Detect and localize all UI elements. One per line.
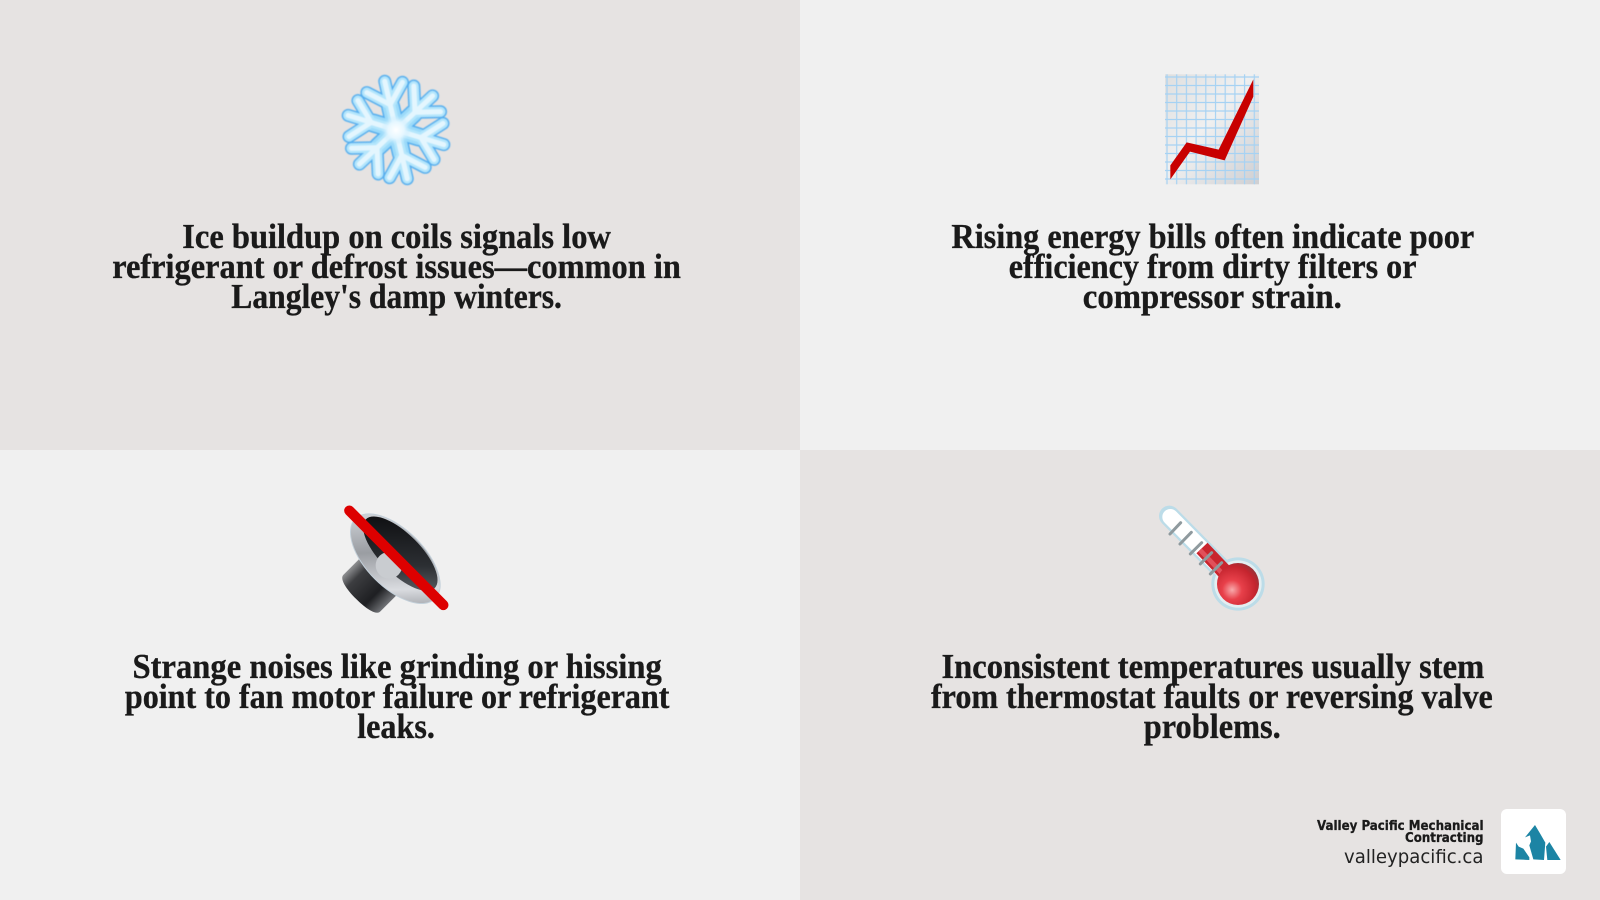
text: inconsistent temperatures: from thermostat faults or reversing valve bbox=[931, 677, 1493, 716]
text: ice buildup: refrigerant or defrost issues—common in bbox=[112, 247, 681, 286]
text: inconsistent temperatures: Inconsistent temperatures usually stem bbox=[942, 647, 1484, 686]
text: ice buildup bbox=[112, 217, 681, 316]
text: ice buildup: Ice buildup on coils signals low bbox=[182, 217, 612, 256]
icon: thermometer bbox=[1169, 516, 1265, 611]
text: strange noises: point to fan motor failure or refrigerant bbox=[125, 677, 670, 716]
panel: strange noises bbox=[0, 450, 800, 900]
text: rising energy bills bbox=[951, 217, 1474, 316]
icon: snowflake bbox=[333, 69, 459, 191]
footer: company name and website: Valley Pacific Mechanical bbox=[1317, 819, 1484, 834]
text: strange noises: Strange noises like grinding or hissing bbox=[132, 647, 662, 686]
icon: chart with rising line bbox=[1165, 74, 1259, 184]
text: inconsistent temperatures: problems. bbox=[1144, 707, 1281, 746]
text: rising energy bills: compressor strain. bbox=[1083, 277, 1342, 316]
footer: company name and website: Contracting bbox=[1405, 831, 1484, 846]
logo card: mountain bbox=[1501, 809, 1566, 874]
text: inconsistent temperatures bbox=[931, 647, 1493, 746]
panel: inconsistent temperatures bbox=[800, 450, 1600, 900]
text: rising energy bills: efficiency from dirty filters or bbox=[1009, 247, 1416, 286]
text: rising energy bills: Rising energy bills often indicate poor bbox=[951, 217, 1474, 256]
text: ice buildup: Langley's damp winters. bbox=[231, 277, 562, 316]
footer: company name and website bbox=[1317, 819, 1484, 868]
text: strange noises: leaks. bbox=[357, 707, 435, 746]
panel: rising energy bills bbox=[800, 0, 1600, 450]
panel: ice buildup bbox=[0, 0, 800, 450]
footer: company name and website: valleypacific.ca bbox=[1344, 846, 1484, 868]
text: strange noises bbox=[125, 647, 670, 746]
icon: muted speaker bbox=[334, 498, 456, 620]
